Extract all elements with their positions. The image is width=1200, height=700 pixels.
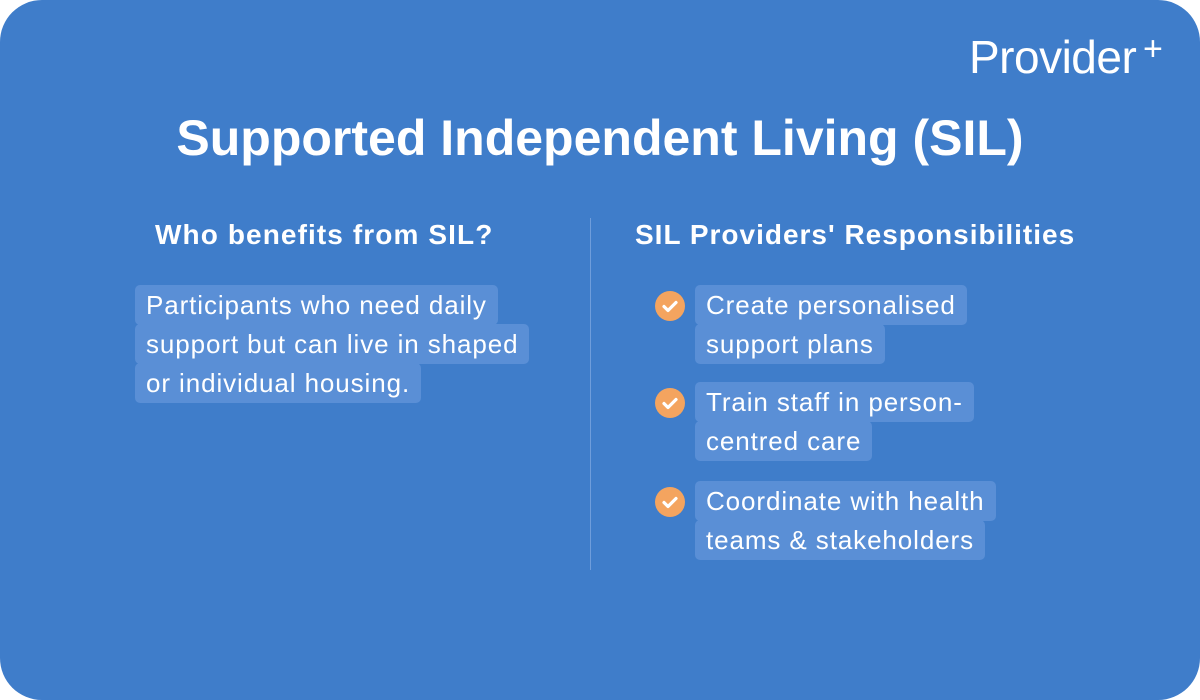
text block: who benefits: or individual housing. xyxy=(146,368,410,398)
text block: who benefits xyxy=(135,285,529,403)
heading: responsibilities: SIL Providers' Responsibilities xyxy=(635,219,1075,250)
icon: check xyxy=(655,291,685,321)
text block: who benefits: Participants who need daily xyxy=(146,290,487,320)
list item 3 xyxy=(655,481,996,560)
item text: Coordinate with health xyxy=(706,486,985,516)
icon: check xyxy=(655,388,685,418)
item text: centred care xyxy=(706,426,861,456)
title: Supported Independent Living (SIL) xyxy=(176,110,1024,166)
list item 2 xyxy=(655,382,974,461)
divider xyxy=(590,218,591,570)
item text: teams & stakeholders xyxy=(706,525,974,555)
logo: + xyxy=(1143,30,1162,68)
item text xyxy=(695,382,974,461)
text block: who benefits: support but can live in shaped xyxy=(146,329,518,359)
list item 1 xyxy=(655,285,967,364)
item text: Train staff in person- xyxy=(706,387,963,417)
heading: who benefits: Who benefits from SIL? xyxy=(155,219,493,250)
item text xyxy=(695,285,967,364)
item text xyxy=(695,481,996,560)
logo: Provider xyxy=(969,31,1136,83)
item text: Create personalised xyxy=(706,290,956,320)
item text: support plans xyxy=(706,329,874,359)
icon: check xyxy=(655,487,685,517)
